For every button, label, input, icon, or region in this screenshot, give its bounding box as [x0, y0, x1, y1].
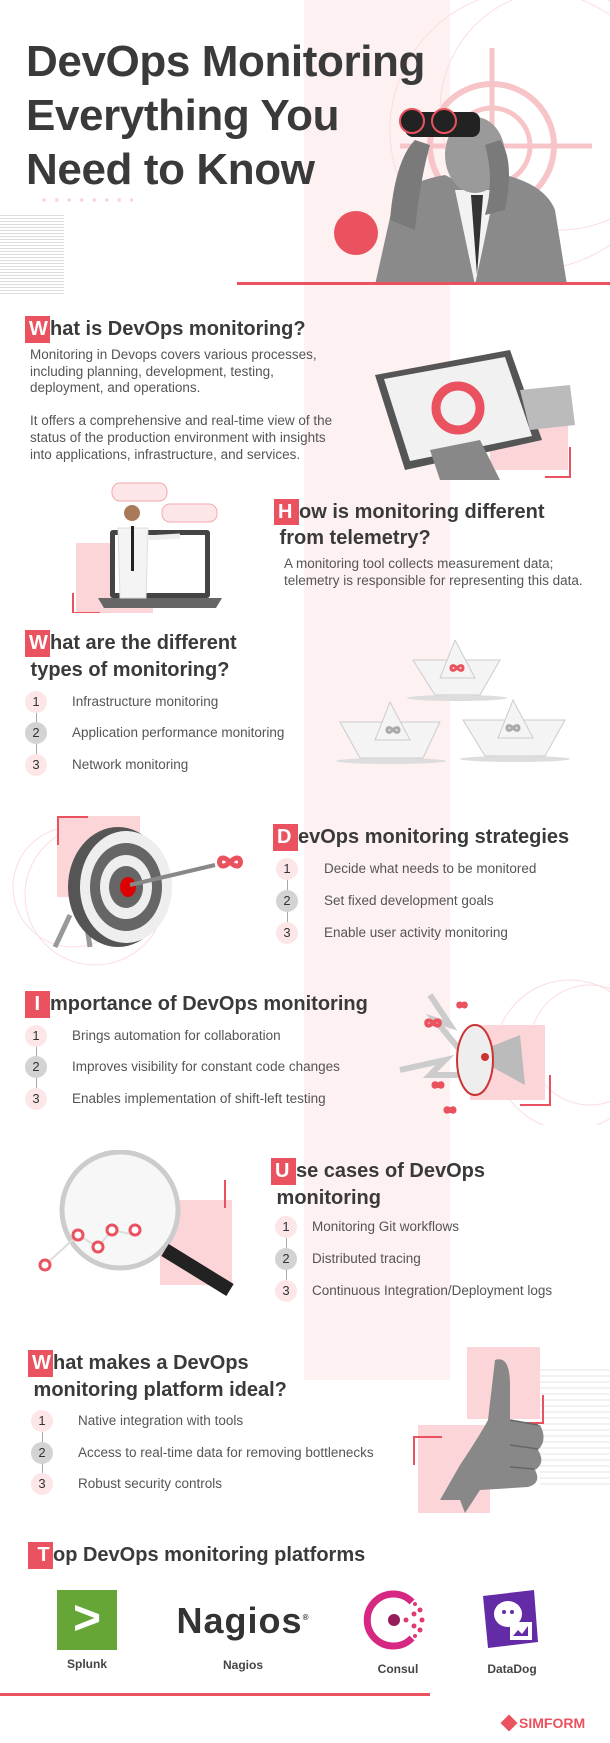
heading: ideal platform: W	[32, 1352, 51, 1374]
heading: importance: mportance of DevOps monitoring	[50, 993, 368, 1015]
bottom divider line	[0, 1693, 430, 1696]
list: use cases: 1	[282, 1219, 290, 1234]
logo: Nagios: Nagios	[223, 1658, 263, 1672]
stripes decoration	[0, 215, 64, 295]
logo: DataDog: DataDog	[487, 1662, 537, 1676]
text: what is devops monitoring: Monitoring in Devops covers various processes,	[30, 347, 317, 362]
hero image: man with binoculars	[376, 108, 566, 282]
text: what is devops monitoring: into applications, infrastructure, and services.	[30, 447, 300, 462]
list: importance: 3	[32, 1091, 40, 1106]
heading: strategies: D	[277, 826, 291, 848]
icon: dartboard target	[12, 816, 243, 966]
list: use cases: Continuous Integration/Deployment logs	[312, 1283, 552, 1298]
list: use cases: 3	[282, 1283, 290, 1298]
list: importance	[25, 1025, 340, 1110]
list: use cases	[275, 1216, 552, 1302]
list: ideal: 3	[38, 1476, 46, 1491]
heading: What is DevOps monitoring: hat is DevOps monitoring?	[50, 318, 306, 340]
logo: DataDog	[483, 1590, 538, 1676]
text: what is devops monitoring: It offers a comprehensive and real-time view of the	[30, 413, 332, 428]
list: importance: Enables implementation of shift-left testing	[72, 1091, 326, 1106]
text: what is devops monitoring: deployment, and operations.	[30, 380, 200, 395]
list: ideal	[31, 1410, 374, 1495]
heading: strategies: evOps monitoring strategies	[298, 826, 569, 848]
heading: monitoring vs telemetry: H	[278, 501, 292, 523]
heading: use cases: monitoring	[277, 1187, 381, 1209]
heading: What is DevOps monitoring: W	[29, 318, 48, 340]
hero decoration: target rings	[390, 0, 610, 266]
heading: ideal platform	[28, 1350, 287, 1401]
title: DevOps Monitoring	[26, 37, 425, 86]
list: types: 3	[32, 757, 40, 772]
list: importance: Brings automation for collaboration	[72, 1028, 281, 1043]
logo: Nagios	[177, 1600, 309, 1672]
logo: Splunk	[57, 1590, 117, 1671]
logo: Consul: Consul	[378, 1662, 418, 1676]
list: ideal: 1	[38, 1413, 46, 1428]
heading: use cases: U	[275, 1160, 289, 1182]
list: strategies: 3	[283, 925, 291, 940]
list: types: Network monitoring	[72, 757, 188, 772]
heading: types of monitoring	[25, 630, 237, 681]
heading: ideal platform: hat makes a DevOps	[53, 1352, 249, 1374]
icon: magnifying glass	[38, 1150, 234, 1296]
heading: importance: I	[35, 993, 40, 1015]
red circle	[334, 211, 378, 255]
list: types: 2	[32, 725, 40, 740]
list: ideal: Access to real-time data for removing bottlenecks	[78, 1445, 374, 1460]
logo: Nagios: Nagios®	[177, 1600, 309, 1641]
logo: Splunk: >	[73, 1592, 101, 1645]
text: telemetry	[284, 556, 583, 588]
logo: Consul	[364, 1590, 424, 1676]
title: Need to Know	[26, 145, 315, 194]
title	[26, 37, 425, 194]
heading: use cases	[271, 1158, 485, 1209]
list: use cases: Distributed tracing	[312, 1251, 421, 1266]
logo: Simform: SIMFORM	[519, 1715, 585, 1731]
heading: top platforms: op DevOps monitoring platforms	[53, 1544, 365, 1566]
heading: types of monitoring: hat are the different	[50, 632, 237, 654]
list: strategies: Set fixed development goals	[324, 893, 494, 908]
list: types: Infrastructure monitoring	[72, 694, 218, 709]
text: what is devops monitoring: including planning, development, testing,	[30, 364, 274, 379]
list: strategies: 2	[283, 893, 291, 908]
heading: ideal platform: monitoring platform ideal?	[34, 1379, 287, 1401]
heading: monitoring vs telemetry: ow is monitoring different	[299, 501, 545, 523]
list: strategies: 1	[283, 861, 291, 876]
logo: Splunk: Splunk	[67, 1657, 107, 1671]
list: ideal: Native integration with tools	[78, 1413, 243, 1428]
list: use cases: 2	[282, 1251, 290, 1266]
heading: top platforms: T	[38, 1544, 50, 1566]
list: strategies: Enable user activity monitoring	[324, 925, 508, 940]
icon: megaphone	[400, 980, 610, 1125]
text: telemetry: A monitoring tool collects measurement data;	[284, 556, 553, 571]
heading: types of monitoring: W	[29, 632, 48, 654]
list: types	[25, 691, 284, 776]
list: types: Application performance monitoring	[72, 725, 284, 740]
list: strategies	[276, 858, 536, 944]
icon: paper boats	[336, 640, 570, 764]
list: use cases: Monitoring Git workflows	[312, 1219, 459, 1234]
text: what is devops monitoring: status of the production environment with insights	[30, 430, 326, 445]
background band	[304, 0, 450, 1380]
list: types: 1	[32, 694, 40, 709]
title: Everything You	[26, 91, 339, 140]
dots decoration	[38, 198, 133, 202]
list: strategies: Decide what needs to be monitored	[324, 861, 536, 876]
list: ideal: Robust security controls	[78, 1476, 222, 1491]
icon: man at laptop with speech bubbles	[72, 482, 222, 613]
text: telemetry: telemetry is responsible for representing this data.	[284, 573, 583, 588]
heading: monitoring vs telemetry	[274, 499, 545, 549]
list: importance: 1	[32, 1028, 40, 1043]
list: importance: 2	[32, 1059, 40, 1074]
list: importance: Improves visibility for constant code changes	[72, 1059, 340, 1074]
heading: monitoring vs telemetry: from telemetry?	[280, 527, 431, 549]
hero divider line	[237, 282, 610, 285]
list: ideal: 2	[38, 1445, 46, 1460]
text: what is devops monitoring	[30, 347, 332, 462]
heading: types of monitoring: types of monitoring?	[31, 659, 229, 681]
icon: thumbs up	[413, 1347, 610, 1513]
heading: use cases: se cases of DevOps	[296, 1160, 485, 1182]
icon: tablet with sync	[375, 350, 575, 480]
